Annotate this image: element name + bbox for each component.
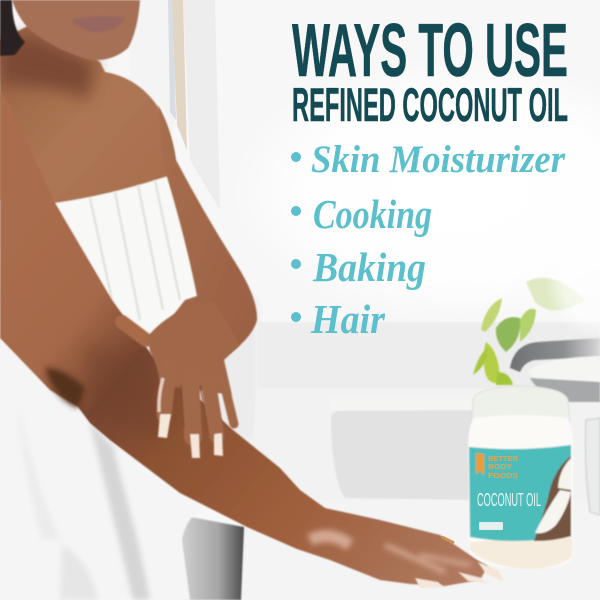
jar oil body xyxy=(468,415,573,568)
jar glass neck xyxy=(472,386,570,422)
elbow crease shadow xyxy=(45,368,85,408)
dark lower towel xyxy=(180,515,244,600)
jar certification badges xyxy=(479,522,503,530)
hair xyxy=(0,0,25,56)
coconut oil jar xyxy=(468,386,573,569)
item: baking: Baking xyxy=(312,244,426,290)
list of uses xyxy=(291,138,566,342)
resting hand highlights xyxy=(310,536,470,572)
upper white towel xyxy=(54,176,197,335)
jar brand name: BETTER xyxy=(488,456,518,463)
coconut flesh xyxy=(558,458,571,490)
white towel skirt xyxy=(0,320,203,600)
soap dish xyxy=(510,338,600,402)
item: cooking: Cooking xyxy=(313,191,432,237)
left arm and resting hand xyxy=(0,90,488,586)
thumb xyxy=(122,322,146,340)
nails on counter xyxy=(415,562,504,588)
jar brand name: BODY xyxy=(488,464,512,471)
jar brand name xyxy=(488,456,518,480)
green leaves xyxy=(473,278,585,385)
title xyxy=(292,8,568,131)
glass on counter xyxy=(586,418,600,515)
jar brand name: FOODS xyxy=(488,473,518,480)
plant fade xyxy=(545,230,600,340)
neck chest and shoulder xyxy=(0,20,176,215)
logo ribbon xyxy=(476,453,484,475)
finger sheen xyxy=(159,378,163,412)
bathroom counter and sink xyxy=(238,322,600,600)
neck shadow xyxy=(0,35,95,100)
fingers xyxy=(164,365,234,437)
face xyxy=(12,0,140,60)
forearm shadow xyxy=(85,345,165,440)
fingernails on forearm xyxy=(158,414,223,458)
jar product name: COCONUT OIL xyxy=(477,490,541,510)
white fade behind text xyxy=(230,55,600,325)
gold ring xyxy=(442,537,454,543)
item: hair: Hair xyxy=(310,296,386,342)
coconut shell xyxy=(534,456,571,541)
item: skin moisturizer: Skin Moisturizer xyxy=(311,138,566,181)
plant and soap dish xyxy=(473,230,600,402)
right arm xyxy=(150,105,257,360)
jar label xyxy=(469,445,571,541)
back of hand xyxy=(148,302,240,395)
sink basin xyxy=(331,410,482,500)
applying hand xyxy=(122,302,240,437)
